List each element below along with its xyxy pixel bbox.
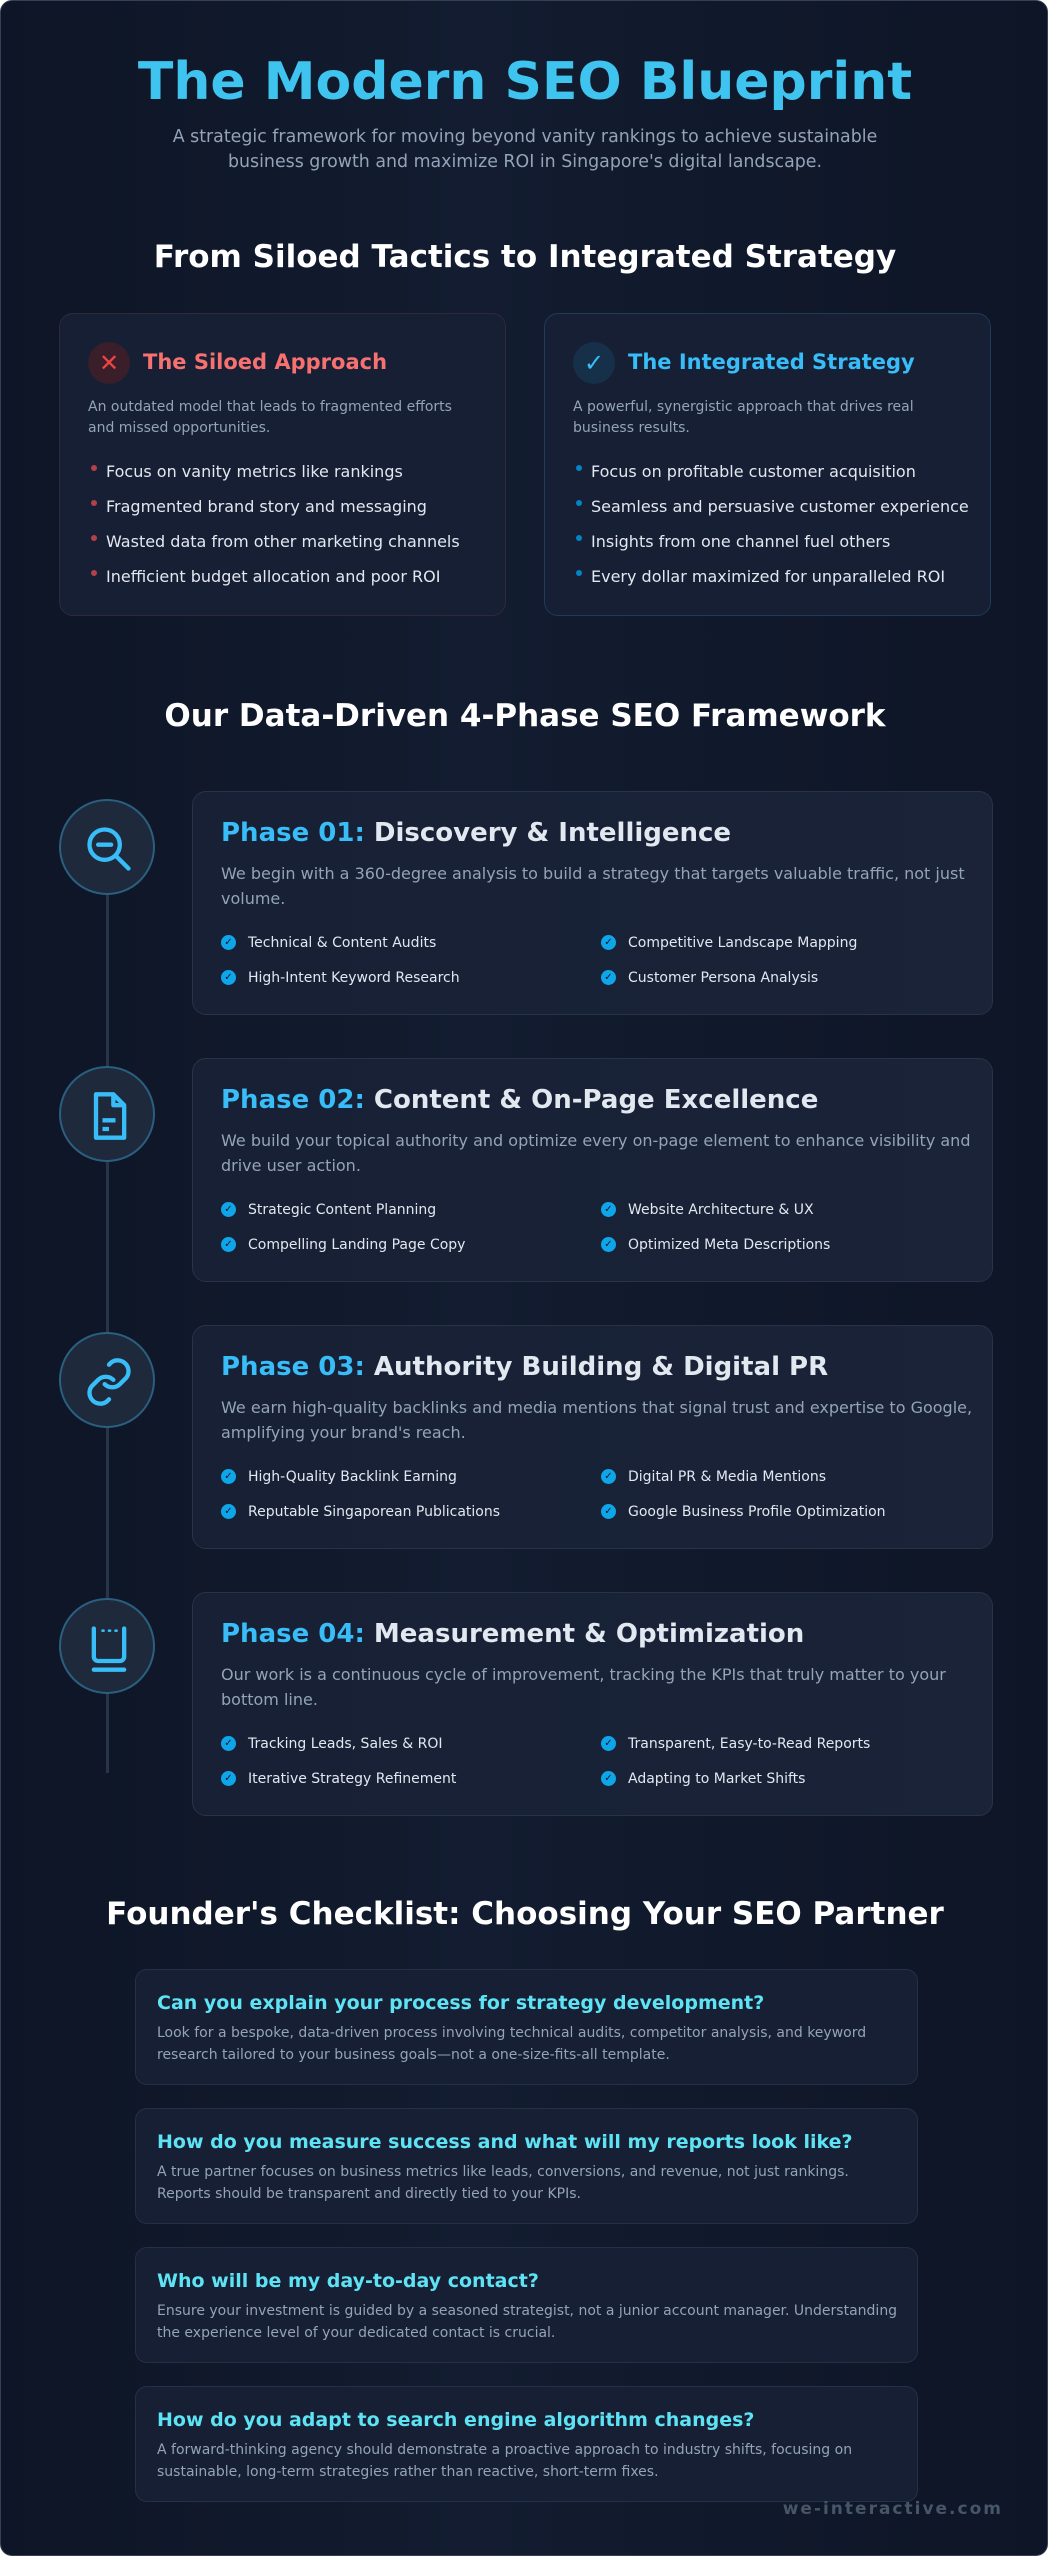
icon: check: ✓: [584, 349, 604, 377]
panel: siloed approach: [59, 313, 506, 616]
phase 01 card: Competitive Landscape Mapping: [628, 935, 857, 951]
checklist item 1: Can you explain your process for strategy development?: [157, 1992, 764, 2014]
phase 02 card: Optimized Meta Descriptions: [628, 1237, 830, 1253]
checklist item 1: Look for a bespoke, data-driven process involving technical audits, competitor analysis, and keyword research tailored to your business goals—not a one-size-fits-all template.: [157, 2025, 866, 2063]
phase 02 card: We build your topical authority and optimize every on-page element to enhance visibility and drive user action.: [221, 1131, 970, 1175]
checklist item 4: [135, 2386, 918, 2502]
footer brand: we-interactive.com: [783, 2499, 1003, 2519]
phase 01 card: We begin with a 360-degree analysis to build a strategy that targets valuable traffic, not just volume.: [221, 864, 965, 908]
icon: x: ✕: [99, 349, 119, 377]
phase 04 card: Phase 04: Measurement & Optimization: [221, 1619, 804, 1649]
checklist item 3: Who will be my day-to-day contact?: [157, 2270, 539, 2292]
phase 02 card: Phase 02: Content & On-Page Excellence: [221, 1085, 818, 1115]
integrated heading: The Integrated Strategy: [628, 350, 915, 374]
heading: siloed vs integrated: From Siloed Tactics to Integrated Strategy: [154, 239, 896, 275]
timeline line: [106, 851, 109, 1773]
checklist item 4: A forward-thinking agency should demonstrate a proactive approach to industry shifts, focusing on sustainable, long-term strategies rather than reactive, short-term fixes.: [157, 2442, 852, 2480]
phase 03 card: High-Quality Backlink Earning: [248, 1469, 457, 1485]
siloed bullets: Wasted data from other marketing channels: [106, 532, 460, 551]
phase 03 card: We earn high-quality backlinks and media mentions that signal trust and expertise to Google, amplifying your brand's reach.: [221, 1398, 972, 1442]
heading: checklist: Founder's Checklist: Choosing Your SEO Partner: [106, 1896, 944, 1932]
icon: measurement: [59, 1598, 155, 1694]
integrated bullets: Insights from one channel fuel others: [591, 532, 890, 551]
panel: integrated strategy: [544, 313, 991, 616]
integrated bullets: [576, 462, 969, 586]
integrated bullets: Every dollar maximized for unparalleled ROI: [591, 567, 945, 586]
integrated bullets: Focus on profitable customer acquisition: [591, 462, 916, 481]
phase 03 card: Phase 03: Authority Building & Digital PR: [221, 1352, 828, 1382]
checklist item 2: A true partner focuses on business metrics like leads, conversions, and revenue, not just rankings. Reports should be transparent and directly tied to your KPIs.: [157, 2164, 849, 2202]
phase 04 card: Adapting to Market Shifts: [628, 1771, 805, 1787]
phase 04 card: Our work is a continuous cycle of improvement, tracking the KPIs that truly matter to your bottom line.: [221, 1665, 946, 1709]
integrated description: A powerful, synergistic approach that drives real business results.: [573, 399, 914, 436]
subtitle: A strategic framework for moving beyond vanity rankings to achieve sustainable business growth and maximize ROI in Singapore's digital landscape.: [173, 127, 877, 172]
checklist item 1: [135, 1969, 918, 2085]
phase 01 card: Customer Persona Analysis: [628, 970, 818, 986]
title: The Modern SEO Blueprint: [138, 52, 912, 112]
phase 01 card: Technical & Content Audits: [248, 935, 436, 951]
integrated bullets: Seamless and persuasive customer experience: [591, 497, 969, 516]
phase 01 card: [192, 791, 993, 1015]
phase 03 card: Reputable Singaporean Publications: [248, 1504, 500, 1520]
phase 03 card: [192, 1325, 993, 1549]
phase 04 card: Tracking Leads, Sales & ROI: [248, 1736, 443, 1752]
phase 02 card: Strategic Content Planning: [248, 1202, 436, 1218]
phase 04 card: Iterative Strategy Refinement: [248, 1771, 456, 1787]
phase 02 card: [192, 1058, 993, 1282]
siloed bullets: Inefficient budget allocation and poor ROI: [106, 567, 440, 586]
checklist item 3: [135, 2247, 918, 2363]
checklist item 3: Ensure your investment is guided by a seasoned strategist, not a junior account manager. Understanding the experience level of your dedicated contact is crucial.: [157, 2303, 897, 2341]
siloed bullets: [91, 462, 460, 586]
icon: x: [88, 342, 130, 384]
checklist item 2: How do you measure success and what will my reports look like?: [157, 2131, 853, 2153]
icon: link: [59, 1332, 155, 1428]
siloed heading: The Siloed Approach: [143, 350, 387, 374]
phase 01 card: High-Intent Keyword Research: [248, 970, 460, 986]
siloed bullets: Fragmented brand story and messaging: [106, 497, 427, 516]
phase 02 card: Compelling Landing Page Copy: [248, 1237, 465, 1253]
phase 02 card: Website Architecture & UX: [628, 1202, 814, 1218]
siloed description: An outdated model that leads to fragmented efforts and missed opportunities.: [88, 399, 452, 436]
icon: check: [573, 342, 615, 384]
icon: document: [59, 1066, 155, 1162]
siloed bullets: Focus on vanity metrics like rankings: [106, 462, 403, 481]
checklist item 4: How do you adapt to search engine algorithm changes?: [157, 2409, 754, 2431]
phase 04 card: [192, 1592, 993, 1816]
phase 03 card: Digital PR & Media Mentions: [628, 1469, 826, 1485]
icon: search: [59, 799, 155, 895]
phase 01 card: Phase 01: Discovery & Intelligence: [221, 818, 731, 848]
phase 04 card: Transparent, Easy-to-Read Reports: [628, 1736, 870, 1752]
phase 03 card: Google Business Profile Optimization: [628, 1504, 886, 1520]
checklist item 2: [135, 2108, 918, 2224]
heading: framework: Our Data-Driven 4-Phase SEO Framework: [164, 698, 886, 734]
